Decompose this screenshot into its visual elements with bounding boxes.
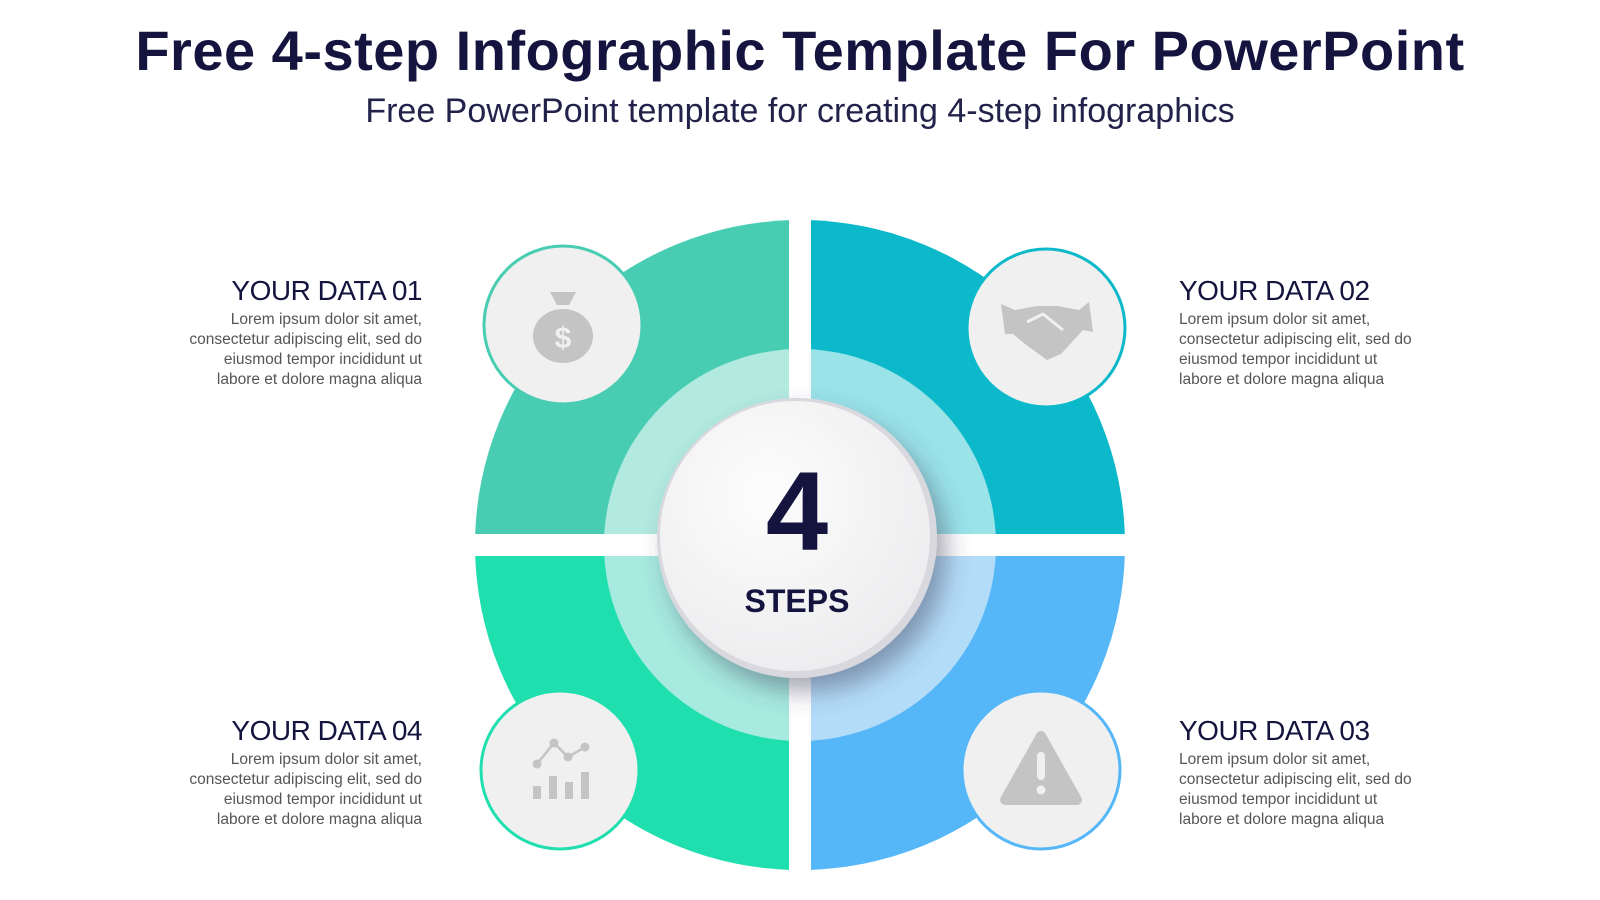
text: data 02 <box>1179 275 1412 388</box>
subtitle: Free PowerPoint template for creating 4-step infographics <box>365 92 1235 130</box>
text: data 03: eiusmod tempor incididunt ut <box>1179 791 1377 808</box>
text: data 04 <box>189 715 422 828</box>
text: data 04: eiusmod tempor incididunt ut <box>224 791 422 808</box>
text: data 04: Lorem ipsum dolor sit amet, <box>231 751 422 768</box>
text: data 04: labore et dolore magna aliqua <box>217 811 422 828</box>
icon: warning <box>962 691 1120 849</box>
text: data 01 <box>189 275 422 388</box>
diagram <box>475 220 1126 870</box>
text: data 03 <box>1179 715 1412 828</box>
text: data 01: labore et dolore magna aliqua <box>217 371 422 388</box>
icon: money bag: $ <box>555 322 572 355</box>
title: Free 4-step Infographic Template For PowerPoint <box>135 19 1465 82</box>
text: data 02: consectetur adipiscing elit, sed do <box>1179 331 1412 348</box>
text: data 02: labore et dolore magna aliqua <box>1179 371 1384 388</box>
text: data 01: YOUR DATA 01 <box>231 275 422 306</box>
text: data 01: eiusmod tempor incididunt ut <box>224 351 422 368</box>
text: data 03: consectetur adipiscing elit, sed do <box>1179 771 1412 788</box>
text: data 04: YOUR DATA 04 <box>231 715 422 746</box>
text: data 02: YOUR DATA 02 <box>1179 275 1370 306</box>
icon: money bag <box>484 246 642 404</box>
text: data 04: consectetur adipiscing elit, sed do <box>189 771 422 788</box>
text: data 03: labore et dolore magna aliqua <box>1179 811 1384 828</box>
text: data 02: eiusmod tempor incididunt ut <box>1179 351 1377 368</box>
center circle: STEPS <box>745 583 849 619</box>
text: data 03: Lorem ipsum dolor sit amet, <box>1179 751 1370 768</box>
text: data 01: consectetur adipiscing elit, sed do <box>189 331 422 348</box>
text: data 01: Lorem ipsum dolor sit amet, <box>231 311 422 328</box>
quadrant 03 <box>811 556 1125 870</box>
quadrant 04 <box>475 556 789 870</box>
icon: handshake <box>967 249 1125 407</box>
quadrant 02 <box>811 220 1125 534</box>
text: data 02: Lorem ipsum dolor sit amet, <box>1179 311 1370 328</box>
center circle <box>657 398 937 678</box>
icon: chart <box>481 691 639 849</box>
center circle: 4 <box>766 449 828 574</box>
quadrant 01 <box>475 220 789 534</box>
text: data 03: YOUR DATA 03 <box>1179 715 1370 746</box>
